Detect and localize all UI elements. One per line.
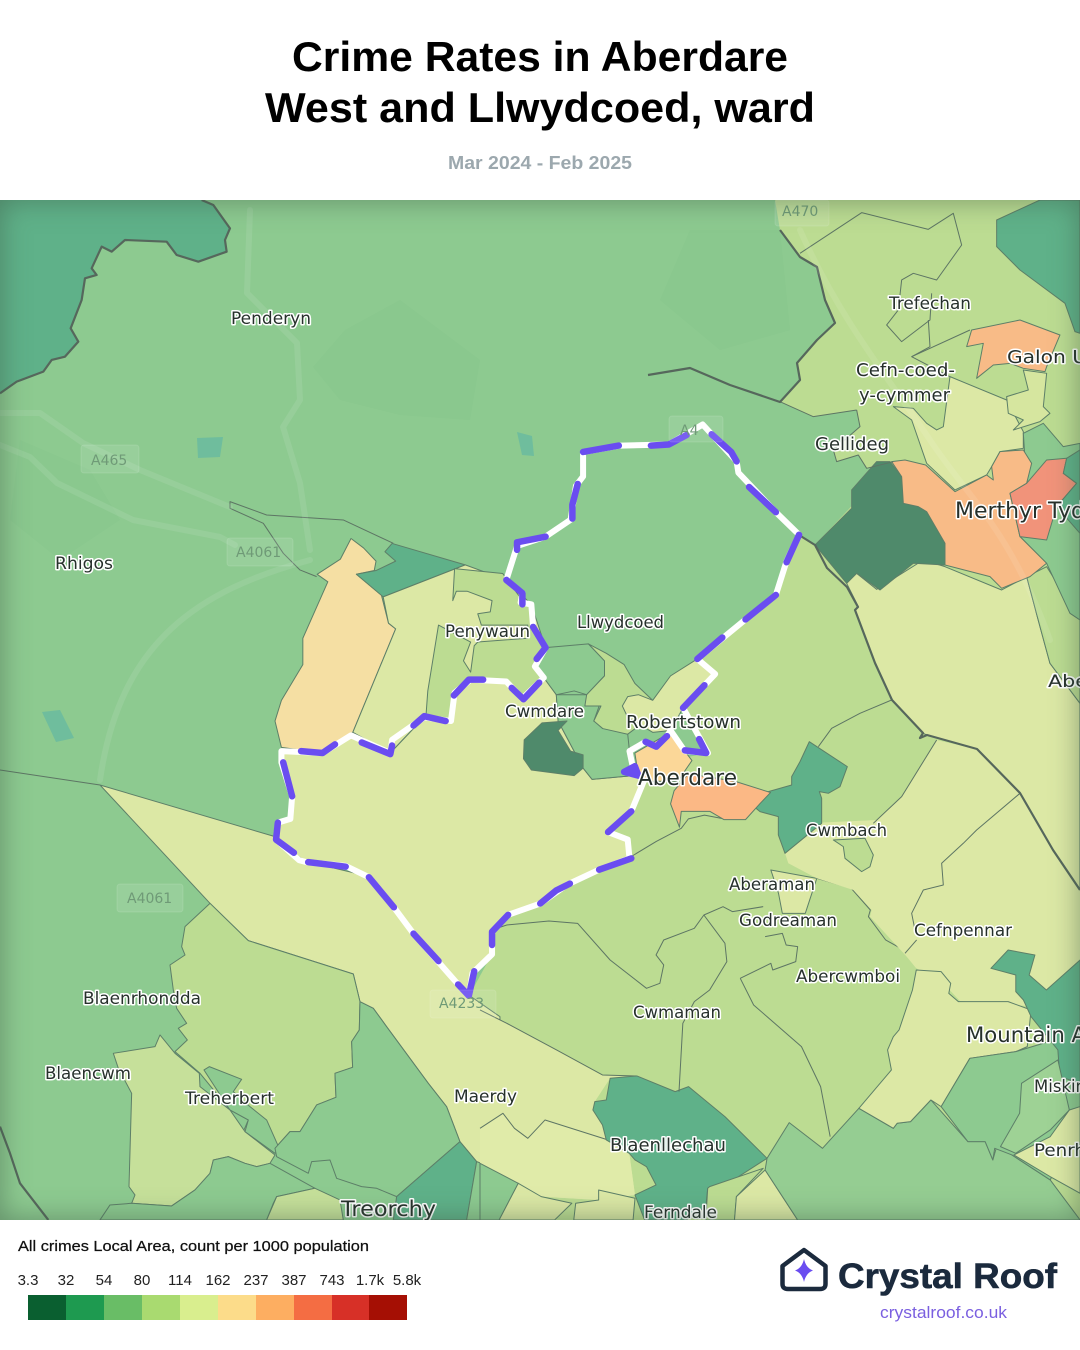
road labels xyxy=(81,200,829,1018)
region: mid green Trecynon xyxy=(585,644,653,734)
place labels: Treherbert xyxy=(184,1089,275,1108)
region: orange Aberdare xyxy=(671,774,771,827)
region: Maerdy band xyxy=(480,1010,637,1200)
roads and rivers xyxy=(0,210,1050,780)
title: West and Llwydcoed, ward xyxy=(265,84,815,131)
region: Blaenllechau xyxy=(593,1076,767,1220)
legend values: 54 xyxy=(96,1272,112,1289)
region: Cwmdare east green xyxy=(556,695,633,779)
region: Robertstown light xyxy=(622,659,715,732)
road labels: A470 xyxy=(782,204,818,220)
regions: south-west, traced in 3x crop coordinates xyxy=(0,785,500,1220)
region: Penywaun mid green xyxy=(426,569,546,721)
region: Cefnpennar xyxy=(785,740,1080,1010)
logo xyxy=(780,1248,1058,1322)
place labels: Aberdare xyxy=(638,766,737,791)
road labels: A4233 xyxy=(439,996,484,1012)
place labels: Robertstown xyxy=(626,712,741,733)
place labels: Maerdy xyxy=(454,1087,517,1106)
place labels: Gellideg xyxy=(815,434,889,455)
region: Galon Uchaf orange xyxy=(967,320,1060,378)
region: Blaenrhondda xyxy=(170,903,360,1148)
place labels: Cefn-coed- xyxy=(856,360,955,381)
place labels: Galon U xyxy=(1007,347,1080,368)
place labels: Cefnpennar xyxy=(914,921,1012,940)
region: Merthyr orange xyxy=(892,450,1047,588)
region: main ward light xyxy=(276,678,644,996)
place labels: Abe xyxy=(1048,672,1080,691)
white boundary line xyxy=(276,425,799,996)
place labels: Blaenllechau xyxy=(610,1135,726,1156)
road labels: A4 xyxy=(680,423,699,439)
region: Treorchy teal xyxy=(393,1142,477,1220)
region: Treorchy green xyxy=(275,1002,460,1197)
region: tan west xyxy=(275,539,396,753)
regions: Cwmbach and east, traced from crop xyxy=(750,560,1080,1010)
choropleth map xyxy=(0,200,1080,1220)
place labels: Blaencwm xyxy=(45,1064,131,1083)
region: teal strip xyxy=(356,543,465,597)
legend values: 114 xyxy=(168,1272,192,1289)
region: south green xyxy=(467,1162,500,1220)
region: Treorchy light xyxy=(267,1188,343,1220)
legend values: 162 xyxy=(205,1272,231,1289)
place labels: Penywaun xyxy=(445,622,530,641)
place labels: Cwmaman xyxy=(633,1003,721,1022)
place labels: Penderyn xyxy=(231,309,311,328)
place labels: Cwmbach xyxy=(806,821,887,840)
brand url: crystalroof.co.uk xyxy=(880,1304,1008,1322)
place labels: Llwydcoed xyxy=(577,613,664,632)
region: dark Cwmdare low-rate area xyxy=(523,721,583,776)
title xyxy=(265,33,815,173)
region: central light xyxy=(893,377,1023,490)
region: east mid green xyxy=(469,200,1080,1220)
legend title: All crimes Local Area, count per 1000 population xyxy=(18,1238,369,1255)
region: Treherbert xyxy=(113,1035,275,1206)
region: band lower lighter xyxy=(480,1113,635,1200)
thin region lines xyxy=(491,907,763,988)
legend values: 32 xyxy=(58,1272,74,1289)
place labels: Rhigos xyxy=(55,554,113,573)
place labels: y-cymmer xyxy=(859,385,951,406)
region: teal east of Aberdare xyxy=(750,742,847,853)
south Aberdare boundary xyxy=(631,813,749,857)
subtle land patches xyxy=(10,230,790,560)
region: north light patch xyxy=(1007,370,1050,430)
purple dashes xyxy=(276,434,799,996)
map edge shadow xyxy=(0,200,1080,1220)
region: Merthyr red xyxy=(1010,458,1077,540)
region: south green row xyxy=(100,1157,315,1220)
region: right-edge teal xyxy=(997,200,1080,333)
thin region lines xyxy=(780,213,970,468)
legend values: 1.7k xyxy=(356,1272,385,1289)
legend values: 743 xyxy=(319,1272,345,1289)
legend xyxy=(18,1238,422,1320)
regions around Merthyr, traced from crop xyxy=(780,200,1080,620)
road labels: A465 xyxy=(91,453,127,469)
place labels: Cwmdare xyxy=(505,702,584,721)
place labels: Penrh xyxy=(1034,1141,1080,1160)
road labels: A4061 xyxy=(127,891,172,907)
icon: house with star xyxy=(782,1250,826,1289)
regions: far south-east, traced from crop xyxy=(859,950,1080,1193)
region: Treherbert valley xyxy=(204,1067,280,1153)
place labels: Aberaman xyxy=(729,875,815,894)
regions: south centre and east, traced from crop xyxy=(480,870,1080,1220)
region: east light area xyxy=(847,560,1080,890)
legend values: 5.8k xyxy=(393,1272,422,1289)
region: Mountain Ash light xyxy=(859,970,1031,1128)
region: Penrhiw light xyxy=(1014,1107,1080,1193)
region: Penywaun light xyxy=(353,565,546,753)
region: south-west of Blaenllechau xyxy=(480,1163,518,1220)
title: Mar 2024 - Feb 2025 xyxy=(448,153,632,173)
legend values: 237 xyxy=(243,1272,269,1289)
place labels: Godreaman xyxy=(739,911,837,930)
place labels: Abercwmboi xyxy=(796,967,900,986)
region: dark low-rate area by Gellideg xyxy=(815,462,945,590)
regions around the ward, traced from crop xyxy=(275,539,771,996)
region: Aberaman light xyxy=(771,870,817,913)
road labels: A4061 xyxy=(236,545,281,561)
county boundaries xyxy=(0,230,1080,890)
legend values: 80 xyxy=(134,1272,150,1289)
region: Cwmbach blob xyxy=(833,838,873,872)
region: Mountain Ash teal xyxy=(991,950,1080,1083)
legend colour scale xyxy=(28,1295,407,1320)
region: north-west high-rate area xyxy=(0,200,393,577)
place labels: Trefechan xyxy=(888,294,971,313)
legend values: 3.3 xyxy=(18,1272,38,1289)
brand name: Crystal Roof xyxy=(838,1257,1057,1296)
region: east mid green xyxy=(1027,567,1080,703)
legend values: 387 xyxy=(281,1272,307,1289)
region: Miskin greens xyxy=(941,1040,1080,1180)
region: big south-east green xyxy=(765,1100,1080,1220)
place labels xyxy=(45,294,1080,1222)
title: Crime Rates in Aberdare xyxy=(292,33,788,80)
region: south-west band xyxy=(100,785,500,1173)
region: tan Aberdare centre xyxy=(635,732,692,781)
legend values xyxy=(18,1272,422,1289)
region: east green column xyxy=(1010,423,1080,620)
ward boundary xyxy=(276,425,799,996)
place labels: Blaenrhondda xyxy=(83,989,201,1008)
region: east dark strip xyxy=(1057,450,1080,533)
region: Cwmdare green xyxy=(535,644,605,695)
region: Miskin xyxy=(1000,1060,1069,1153)
